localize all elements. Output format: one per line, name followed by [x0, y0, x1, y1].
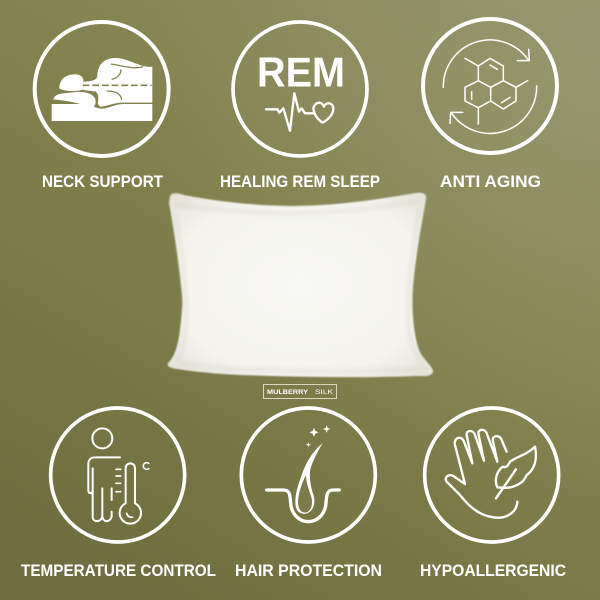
icon: person and thermometer [51, 408, 185, 542]
icon: hand and feather [425, 408, 559, 542]
logo: mulberry silk: MULBERRY [267, 389, 309, 396]
label: anti aging: ANTI AGING [440, 173, 541, 191]
label: hair protection: HAIR PROTECTION [235, 562, 382, 580]
logo: mulberry silk: SILK [315, 390, 333, 396]
label: temperature control: TEMPERATURE CONTROL [21, 562, 216, 580]
panel: hypoallergenic [420, 408, 566, 580]
panel: neck support [35, 22, 169, 191]
icon: REM heartbeat [233, 22, 367, 156]
panel: healing rem sleep [220, 22, 380, 191]
label: neck support: NECK SUPPORT [42, 173, 163, 191]
icon: hair follicle [241, 408, 375, 542]
label: hypoallergenic: HYPOALLERGENIC [420, 562, 566, 580]
panel: temperature control [21, 408, 216, 580]
label: healing rem sleep: HEALING REM SLEEP [220, 173, 380, 191]
REM heading: REM [257, 48, 345, 96]
logo: mulberry silk [264, 384, 336, 398]
panel: hair protection [235, 408, 382, 580]
icon: molecule with arrows [423, 19, 557, 153]
icon: neck support [35, 22, 169, 156]
pillow [168, 193, 433, 377]
panel: anti aging [423, 19, 557, 191]
